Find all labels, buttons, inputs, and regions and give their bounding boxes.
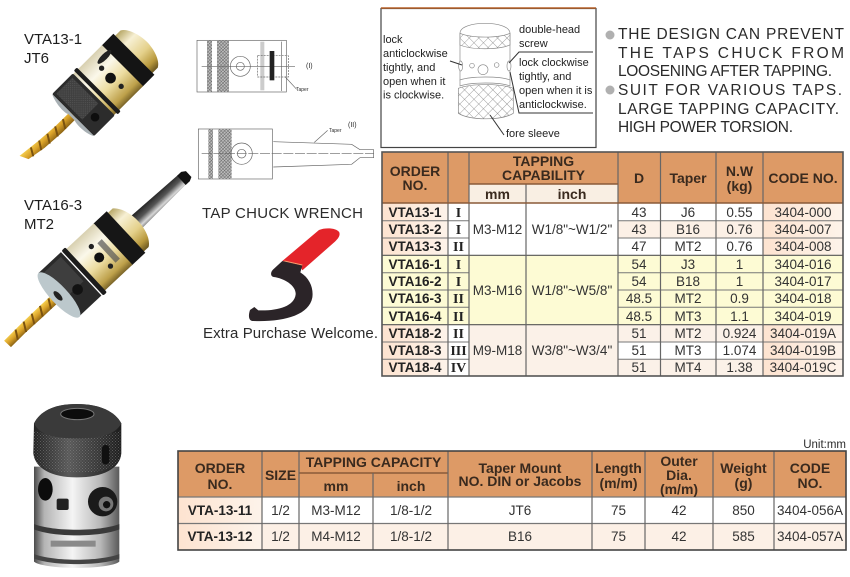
table rows: II	[453, 292, 464, 307]
grid	[178, 451, 846, 550]
diagram: fore sleeve outline	[458, 23, 513, 119]
header text: (m/m)	[660, 481, 698, 497]
table rows: MT4	[674, 360, 702, 375]
table rows: M3-M12	[311, 503, 361, 518]
callout: double-head screw: screw	[519, 38, 548, 50]
feature list: LOOSENING AFTER TAPPING.	[618, 63, 832, 80]
body	[65, 223, 132, 292]
group text	[473, 222, 612, 358]
table rows: MT2	[674, 326, 702, 341]
red handle	[282, 228, 340, 270]
table rows: VTA16-2	[388, 274, 442, 289]
table: VTA-13 specifications	[178, 451, 846, 550]
gold rear body	[113, 23, 165, 75]
table: VTA specifications	[382, 152, 843, 376]
knurled sleeve	[39, 252, 101, 316]
header text: inch	[397, 478, 425, 494]
table rows: JT6	[509, 503, 531, 518]
label: VTA13-1 JT6: VTA13-1	[24, 31, 82, 48]
header text: inch	[558, 186, 586, 202]
header text: Weight	[720, 460, 767, 476]
photo: VTA16-3 chuck	[0, 152, 210, 366]
feature list: LARGE TAPPING CAPACITY.	[618, 101, 839, 118]
group text: W1/8"~W5/8"	[532, 283, 612, 298]
table rows: 0.55	[726, 205, 753, 220]
rows	[178, 497, 846, 523]
table rows: VTA18-3	[388, 343, 442, 358]
table rows: B18	[676, 274, 700, 289]
table rows: III	[450, 344, 467, 359]
table rows: II	[453, 310, 464, 325]
group text: W3/8"~W3/4"	[532, 343, 612, 358]
label: VTA13-1 JT6	[24, 31, 82, 67]
table rows: 3404-016	[774, 257, 832, 272]
table rows: 0.9	[730, 291, 749, 306]
header text: NO. DIN or Jacobs	[459, 473, 582, 489]
table rows: VTA18-4	[388, 360, 442, 375]
table rows: 3404-019A	[770, 326, 836, 341]
table rows: 1.074	[723, 343, 757, 358]
callout: lock clockwise	[510, 57, 593, 113]
header text: Outer	[660, 453, 698, 469]
lower steel body	[34, 467, 119, 568]
photo: VTA-13 silver chuck	[33, 404, 121, 568]
table rows: MT2	[674, 291, 702, 306]
table rows: M4-M12	[311, 529, 361, 544]
header text: Length	[595, 460, 642, 476]
drill bit	[3, 289, 65, 348]
header text: CODE	[790, 460, 830, 476]
table rows: MT3	[674, 309, 702, 324]
table rows: 42	[671, 503, 687, 518]
label: VTA16-3 MT2	[24, 197, 82, 233]
callout: lock clockwise: anticlockwise.	[519, 99, 587, 111]
header text: (g)	[735, 475, 752, 491]
callout: lock anticlockwise: open when it	[383, 76, 445, 88]
header text: NO.	[403, 177, 427, 193]
table rows: 42	[671, 529, 687, 544]
table rows: 3404-000	[774, 205, 832, 220]
header text	[195, 453, 830, 497]
wrench title: TAP CHUCK WRENCH	[202, 205, 363, 222]
photo: VTA13-1 chuck	[4, 20, 169, 184]
drawing labels: (II)	[348, 122, 357, 129]
callout: double-head screw	[509, 24, 593, 63]
table rows: 1	[736, 257, 743, 272]
header text: D	[634, 170, 644, 186]
ring	[74, 67, 121, 114]
header text: Taper	[669, 170, 707, 186]
table rows: 75	[611, 503, 626, 518]
header text: NO.	[798, 475, 822, 491]
panel: chuck lock diagram	[381, 8, 596, 148]
table rows: I	[456, 275, 461, 290]
black band	[102, 34, 154, 87]
gold rear	[107, 202, 156, 253]
table rows: 48.5	[626, 291, 652, 306]
logo	[51, 541, 96, 547]
feature list: THE DESIGN CAN PREVENT	[618, 26, 845, 43]
taper shank	[129, 174, 188, 230]
table rows: B16	[676, 222, 700, 237]
sleeve front face	[32, 267, 86, 323]
callout: lock anticlockwise: anticlockwise	[383, 48, 448, 60]
drawing labels: Taper	[329, 128, 342, 134]
callout: lock anticlockwise: is clockwise.	[383, 90, 444, 102]
black hook	[249, 261, 313, 321]
wrench note: Extra Purchase Welcome.	[203, 325, 378, 342]
table rows: VTA16-4	[388, 309, 442, 324]
table rows: 0.76	[726, 239, 753, 254]
table rows: 43	[631, 222, 647, 237]
callout: lock clockwise: tightly, and	[519, 71, 571, 83]
bore	[61, 408, 94, 420]
table rows: VTA18-2	[388, 326, 442, 341]
bullet	[606, 86, 614, 94]
table rows: MT3	[674, 343, 702, 358]
header text: CODE NO.	[768, 170, 838, 186]
table rows: 0.76	[726, 222, 753, 237]
header text: (kg)	[727, 178, 752, 194]
label: VTA13-1 JT6: JT6	[24, 50, 49, 67]
table rows	[388, 205, 837, 376]
callout: lock clockwise: open when it is	[519, 85, 593, 97]
table rows: VTA13-1	[388, 205, 442, 220]
table rows: 51	[631, 326, 647, 341]
header text: SIZE	[265, 467, 296, 483]
table rows: 51	[631, 360, 647, 375]
table rows: 1.38	[726, 360, 753, 375]
header background	[178, 451, 846, 497]
callout: fore sleeve	[490, 115, 560, 140]
table rows: 1/8-1/2	[390, 529, 432, 544]
label: VTA16-3 MT2: MT2	[24, 216, 54, 233]
table rows: 48.5	[626, 309, 652, 324]
table rows: VTA-13-11	[188, 503, 253, 518]
grid	[382, 152, 843, 376]
header text: TAPPING CAPACITY	[306, 454, 442, 470]
header text: N.W	[726, 163, 754, 179]
table rows: 3404-056A	[777, 503, 843, 518]
header text: TAPPING	[513, 153, 574, 169]
feature list	[606, 26, 845, 136]
icon: tap chuck wrench	[249, 228, 340, 321]
table rows: 850	[732, 503, 755, 518]
header text: CAPABILITY	[502, 167, 586, 183]
holes	[38, 478, 53, 501]
callout: lock anticlockwise: lock	[383, 34, 403, 46]
table rows: 43	[631, 205, 647, 220]
sleeve front face	[49, 94, 94, 139]
label: VTA16-3 MT2: VTA16-3	[24, 197, 82, 214]
header text: mm	[324, 478, 348, 494]
unit note: Unit:mm	[803, 439, 846, 451]
table rows: 54	[631, 257, 647, 272]
table rows: VTA13-3	[388, 239, 442, 254]
drawing labels: (I)	[306, 63, 313, 70]
table rows: IV	[451, 361, 466, 376]
table rows: 51	[631, 343, 647, 358]
technical drawing: type I	[197, 40, 297, 92]
table rows	[187, 503, 843, 544]
drill bit	[20, 106, 79, 166]
table rows: VTA-13-12	[187, 529, 253, 544]
table rows: 3404-019B	[770, 343, 836, 358]
table rows: 1/2	[271, 503, 290, 518]
feature list: SUIT FOR VARIOUS TAPS.	[618, 82, 842, 99]
group text: M9-M18	[473, 343, 522, 358]
knurled sleeve	[52, 73, 115, 136]
table rows: 75	[611, 529, 626, 544]
table rows: B16	[508, 529, 532, 544]
header text	[390, 153, 838, 202]
header text: NO.	[208, 476, 232, 492]
table rows: 0.924	[723, 326, 757, 341]
table rows: VTA13-2	[388, 222, 442, 237]
row backgrounds	[382, 203, 843, 255]
table rows: 3404-019C	[770, 360, 837, 375]
group text: M3-M16	[473, 283, 522, 298]
table rows: 3404-019	[774, 309, 832, 324]
technical drawing: type II	[198, 129, 374, 179]
header text: (m/m)	[599, 475, 638, 491]
drawing labels	[296, 63, 357, 134]
header text: ORDER	[390, 163, 440, 179]
header text: Taper Mount	[479, 460, 562, 476]
table rows: VTA16-3	[388, 291, 442, 306]
body	[73, 45, 143, 116]
group text: W1/8"~W1/2"	[532, 222, 612, 237]
table rows: MT2	[674, 239, 702, 254]
table rows: 47	[631, 239, 647, 254]
header text: ORDER	[195, 460, 245, 476]
header text: Dia.	[666, 467, 692, 483]
table rows: 3404-008	[774, 239, 832, 254]
table rows: II	[453, 240, 464, 255]
ring	[61, 247, 107, 296]
slot	[102, 445, 109, 464]
header text: mm	[485, 186, 510, 202]
table rows: 3404-007	[774, 222, 832, 237]
callout: double-head screw: double-head	[519, 24, 580, 36]
table rows: 1	[736, 274, 743, 289]
table rows: II	[453, 327, 464, 342]
table rows: 1/8-1/2	[390, 503, 432, 518]
table rows: 3404-018	[774, 291, 832, 306]
table rows: 1.1	[730, 309, 749, 324]
knurled sleeve	[33, 404, 121, 477]
drawing labels: Taper	[296, 87, 309, 93]
feature list: THE TAPS CHUCK FROM	[618, 45, 844, 62]
callout: lock anticlockwise	[383, 34, 462, 102]
black band	[93, 211, 145, 265]
group text: M3-M12	[473, 222, 522, 237]
callout: lock anticlockwise: tightly, and	[383, 62, 435, 74]
table rows: I	[456, 206, 461, 221]
table rows: 54	[631, 274, 647, 289]
table rows: I	[456, 258, 461, 273]
table rows: J3	[681, 257, 695, 272]
callout: lock clockwise: lock clockwise	[519, 57, 589, 69]
collar grooves	[34, 524, 119, 535]
header background	[382, 152, 843, 203]
bullet	[606, 30, 614, 40]
table rows: 3404-017	[774, 274, 832, 289]
table rows: 3404-057A	[777, 529, 843, 544]
table rows: 585	[732, 529, 755, 544]
table rows: I	[456, 223, 461, 238]
table rows: J6	[681, 205, 695, 220]
table rows: 1/2	[271, 529, 290, 544]
feature list: HIGH POWER TORSION.	[618, 119, 793, 136]
table rows: VTA16-1	[388, 257, 442, 272]
callout: fore sleeve: fore sleeve	[506, 128, 560, 140]
